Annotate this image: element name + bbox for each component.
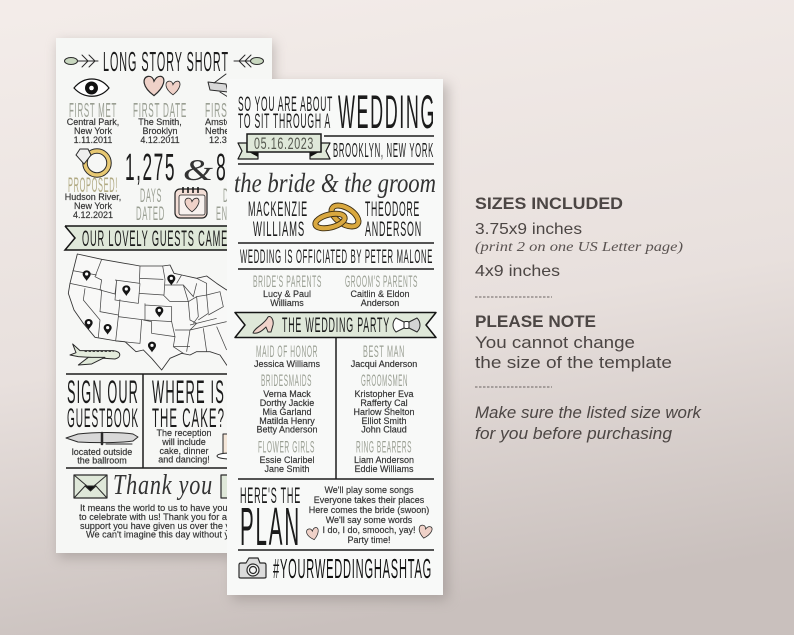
pins [83,270,175,352]
banner: the wedding party [235,312,436,338]
block: ring bearers [354,438,414,474]
text: WEDDING IS OFFICIATED BY PETER MALONE [240,247,433,268]
block: groomsmen: Harlow Shelton [353,407,415,417]
panel: back card story: 1,275 [125,147,176,189]
map: united states with pins [68,254,250,373]
block: first met: New York [74,126,113,136]
text: thank you message: to celebrate with us! Thank you for all the [79,512,246,522]
dividers [66,374,272,468]
block: guestbook: the ballroom [77,456,127,466]
block: flower girls: Jane Smith [264,464,310,474]
panel: back card story: GUESTBOOK [67,403,139,433]
stat: days engaged: 800 [216,147,250,189]
block: groom's parents [345,272,418,308]
text: sizes [475,221,683,280]
block: bride's parents: Lucy & Paul [263,289,311,299]
block: groomsmen: Kristopher Eva [354,389,414,399]
heading: so you are about to sit through a wedding: SO YOU ARE ABOUT [238,93,333,116]
block: maid of honor: Jessica Williams [254,359,320,369]
stat: 1,275 days dated: DATED [136,204,165,225]
block: best man: Jacqui Anderson [351,359,417,369]
text: reminder: Make sure the listed size work [475,403,702,422]
text: thank you message: We can't imagine this day without you. [86,530,242,540]
panel: front card program: BRIDE'S PARENTS [253,272,322,291]
icon: envelope left [74,475,107,498]
stat: 1,275 days dated: DAYS [140,186,162,207]
banner: our lovely guests [65,226,272,251]
icon: heart right [417,525,433,539]
block: cake: The reception [156,428,212,438]
panel: back card story: PROPOSED! [68,174,118,197]
text: the plan list: Here comes the bride (swoon) [309,505,429,515]
panel: front card program: MACKENZIE [248,198,308,221]
block: groom's parents: Caitlin & Eldon [350,289,410,299]
block: bridesmaids: Betty Anderson [256,424,318,434]
icon: heart left [306,527,320,541]
text: sizes: 3.75x9 inches [475,221,582,238]
panel: back card story: FIRST TRIP [205,100,259,122]
panel: front card program: FLOWER GIRLS [258,438,315,456]
heading: thank you: Thank you [113,470,213,501]
icon: gold rings [314,201,362,231]
block: first date: Brooklyn [142,126,178,136]
block: first trip: 12.3.2018 [209,135,250,145]
text: OUR LOVELY GUESTS CAME FROM [82,226,262,251]
ribbon: date: 05.16.2023 [254,134,314,153]
text: #YOURWEDDINGHASHTAG [273,553,432,584]
text: WEDDING [338,85,436,138]
block: first trip [205,100,259,145]
block: cake: will include [161,437,206,447]
block: groomsmen: Elliot Smith [361,416,407,426]
text: note: You cannot change [475,333,635,352]
block: best man [351,342,417,369]
heading: the bride and the groom: the bride & the groom [234,168,436,198]
text: sizes: (print 2 on one US Letter page) [475,240,683,255]
block: cake: and dancing! [158,454,210,464]
text: the plan list: I do, I do, smooch, yay! [322,525,416,535]
text: sizes: 4x9 inches [475,263,560,280]
block: bridesmaids: Verna Mack [263,389,311,399]
block: groom's parents: Anderson [361,298,399,308]
block: guestbook: located outside [72,447,132,457]
block: bride's parents [253,272,322,308]
icon: bow tie [393,318,420,332]
card shadow [58,42,448,600]
panel: front card program: RING BEARERS [356,438,412,456]
icon: airplane [70,344,120,365]
block: first met [67,100,119,145]
icon: two hearts [144,76,180,96]
block: first trip: Netherlands [205,126,255,136]
panel: front card program: MAID OF HONOR [256,342,318,361]
block: ring bearers: Eddie Williams [354,464,414,474]
block: maid of honor [254,342,320,369]
block: guestbook [66,374,139,466]
icon: camera [239,558,266,578]
ampersand: & [183,152,213,187]
block: flower girls: Essie Claribel [259,455,315,465]
block: first date: The Smith, [138,117,182,127]
block: proposed: Hudson River, [65,192,121,202]
panel: sizes and notes [475,194,702,443]
panel: back card story: ENGAGED [216,204,258,225]
block: proposed: New York [74,201,113,211]
block: proposed [65,174,121,220]
block: first trip: Amsterdam, [205,117,255,127]
block: ring bearers: Liam Anderson [354,455,414,465]
text: thank you message: It means the world to us to have you here [80,503,249,513]
text: reminder: for you before purchasing [475,424,673,443]
block: bridesmaids [256,371,318,434]
icon: cake [217,434,243,459]
block: first met: 1.11.2011 [74,135,112,145]
text: the plan list: Everyone takes their places [314,495,425,505]
block: first date: 4.12.2011 [140,135,180,145]
text: thank you message: support you have given us over the years. [80,521,251,531]
block: groomsmen [353,371,415,434]
icon: right leaf branch [234,55,264,67]
panel: front card program: ANDERSON [365,218,422,241]
text: note: the size of the template [475,353,672,372]
text: reminder [475,403,702,443]
panel: front card program: WILLIAMS [253,218,305,241]
panel: front card program: GROOM'S PARENTS [345,272,418,291]
block: groomsmen: John Claud [361,424,407,434]
stat: days engaged [216,147,258,225]
dividers [238,136,434,550]
heading: sizes included: SIZES INCLUDED [475,194,623,213]
panel: front card program: PLAN [240,497,301,557]
text: thank you message [79,503,251,540]
names: groom [365,198,422,241]
block: bridesmaids: Dorthy Jackie [260,398,314,408]
block: first date [133,100,187,145]
block: cake: WHERE IS [152,374,225,410]
heading: here's the plan [240,483,301,557]
block: proposed: 4.12.2021 [73,210,113,220]
block: best man: BEST MAN [363,342,405,361]
panel: back card story [56,38,272,553]
block: cake: THE CAKE? [152,403,225,433]
block: first met: Central Park, [67,117,119,127]
heading: so you are about to sit through a wedding [238,85,436,138]
stat: days engaged: DAYS [223,186,245,207]
icon: left leaf branch [64,55,98,67]
block: cake [152,374,243,464]
names: bride [248,198,308,241]
block: bridesmaids: Mia Garland [262,407,312,417]
block: flower girls [258,438,315,474]
heading: please note: PLEASE NOTE [475,312,596,331]
text: note [475,333,672,372]
block: bride's parents: Williams [270,298,304,308]
ribbon: date [238,134,330,159]
block: bridesmaids: Matilda Henry [259,416,315,426]
icon: eye [74,79,109,96]
text: the plan list: We'll play some songs [324,485,414,495]
panel: back card story: FIRST DATE [133,100,187,122]
panel: back card story: LONG STORY SHORT [103,46,229,77]
icon: calendar heart [175,187,207,218]
icon: diamond ring [76,149,109,175]
heading: so you are about to sit through a wedding: TO SIT THROUGH A [238,110,331,133]
text: the plan list: We'll say some words [326,515,413,525]
text: the plan list [309,485,429,545]
panel: back card story: SIGN OUR [67,374,139,410]
panel: front card program: HERE'S THE [240,483,301,508]
panel: front card program [227,79,443,595]
panel: front card program: THEODORE [365,198,420,221]
icon: shoe [253,317,273,333]
stat: 1,275 days dated [125,147,176,225]
panel: front card program: BRIDESMAIDS [261,371,312,390]
block: groomsmen: Rafferty Cal [360,398,408,408]
icon: pen [66,432,138,444]
text: the plan list: Party time! [347,535,391,545]
text: BROOKLYN, NEW YORK [333,140,434,162]
panel: back card story: FIRST MET [69,100,117,122]
icon: small plane [208,74,228,97]
banner: the wedding party: THE WEDDING PARTY [282,314,390,337]
panel: front card program: GROOMSMEN [361,371,408,390]
block: cake: cake, dinner [159,446,209,456]
icon: envelope right [221,475,254,498]
